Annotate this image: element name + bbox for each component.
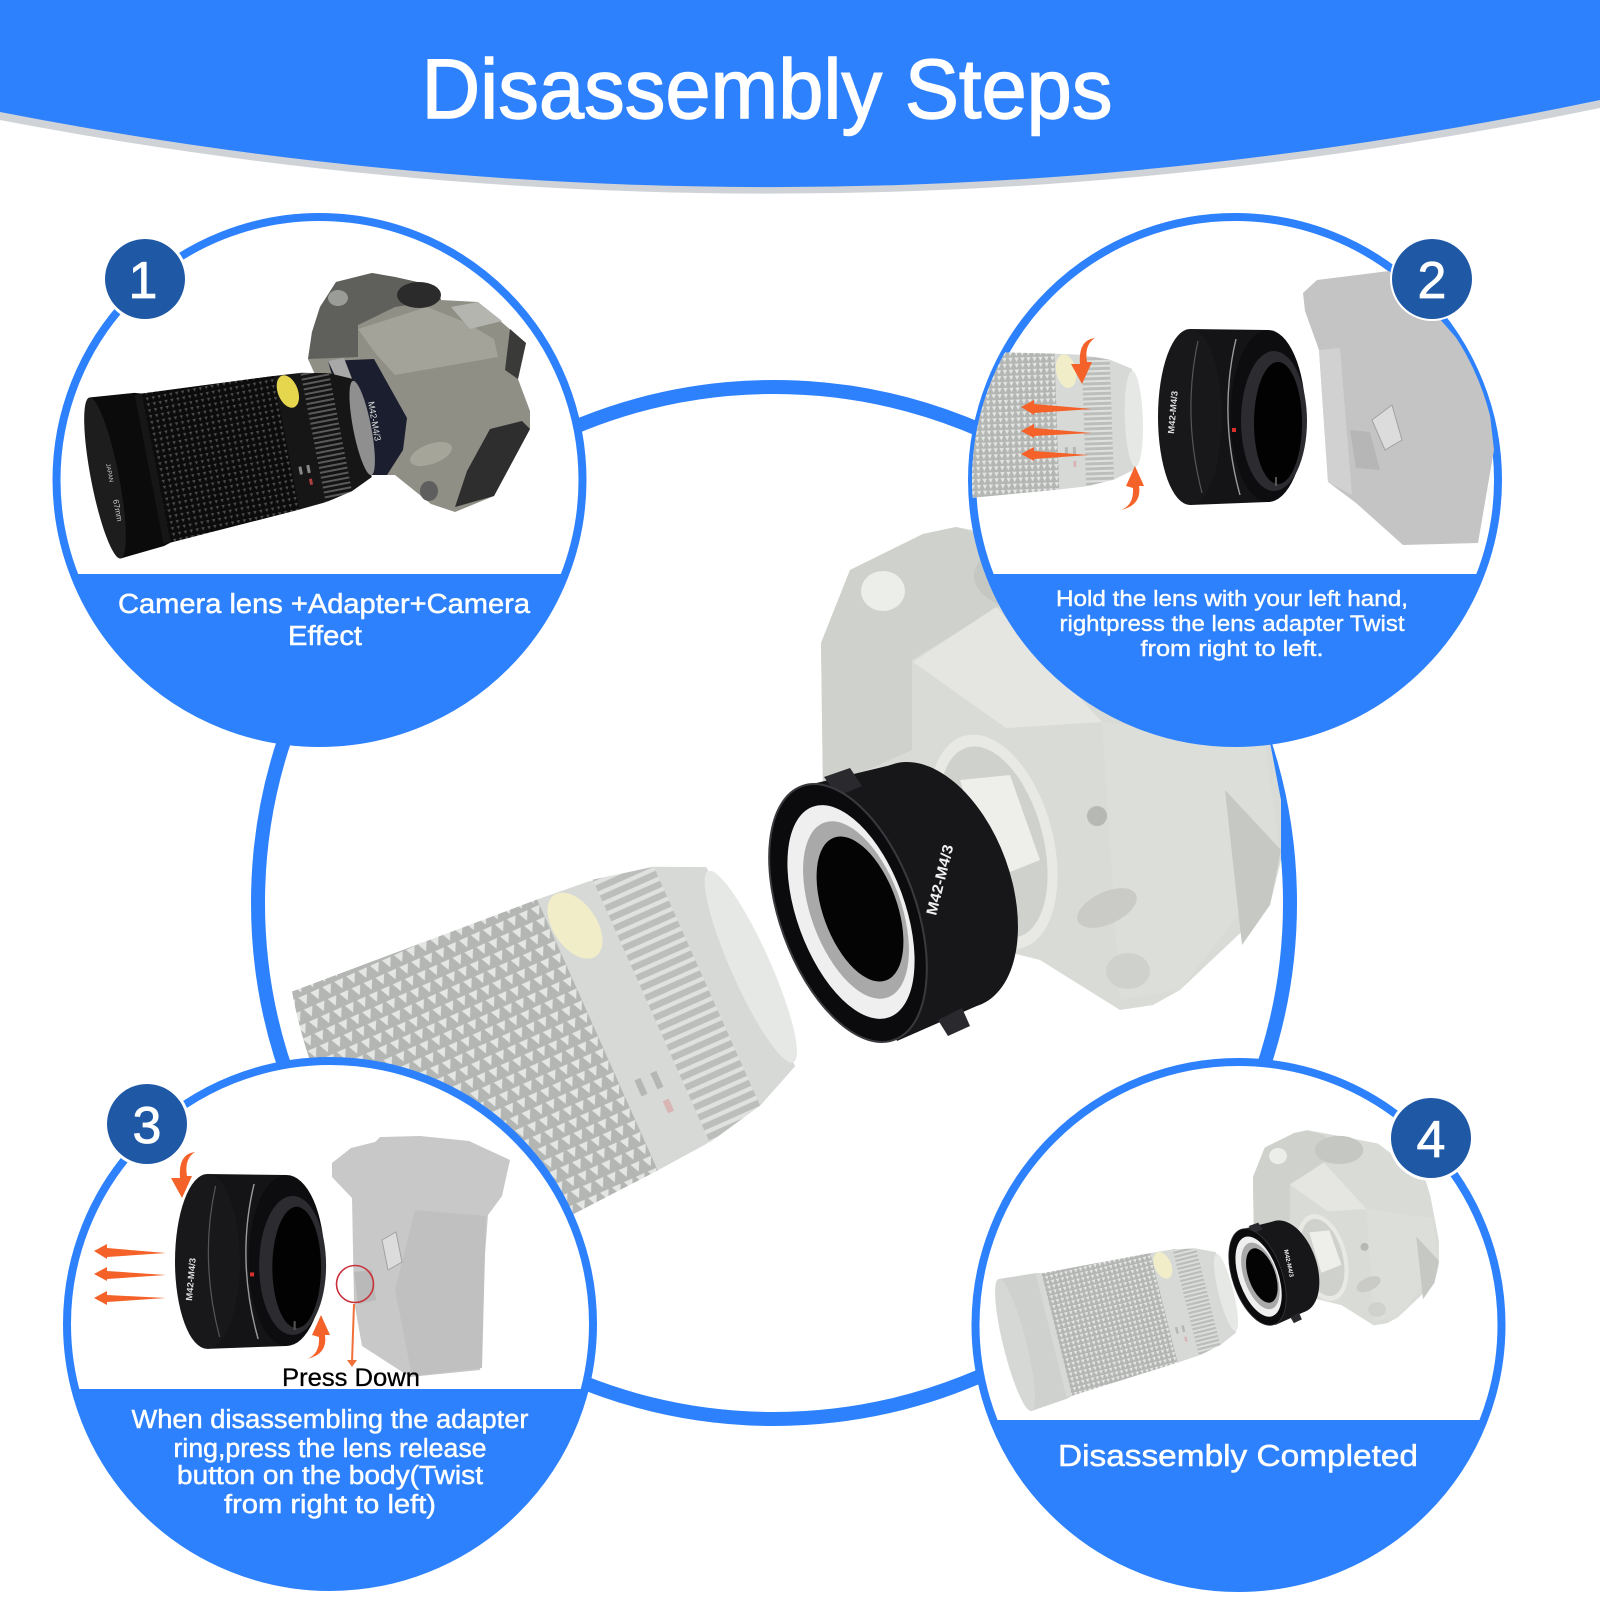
caption band [78,574,561,739]
orange arrows [1021,338,1144,510]
photo: lens, adapter and camera apart [855,271,1494,545]
badge 3 [104,1081,190,1167]
caption text: rightpress the lens adapter Twist [1060,611,1404,636]
badge 2 [1390,237,1474,321]
panel: step 3 [60,1061,600,1599]
photo: faded camera and lens with adapter: M42-M4/3 [1282,1249,1294,1278]
adapter rear view [175,1174,326,1349]
photo: lens, adapter and camera apart: M42-M4/3 [1166,390,1180,434]
badge 1 [102,236,188,322]
central image: faded lens [292,866,797,1214]
badge 3: 3 [133,1097,161,1155]
photo: lens adapter and camera assembled: 67mm [111,499,124,523]
caption text: Effect [288,620,362,651]
caption text: Camera lens +Adapter+Camera [118,588,530,619]
central ring [258,387,1290,1419]
central image: faded camera body [821,527,1281,1010]
caption band [79,1389,581,1583]
central image: adapter ring [738,739,1049,1063]
caption band [994,574,1476,739]
caption text [1056,586,1408,661]
caption text: Hold the lens with your left hand, [1056,586,1408,611]
badge 1: 1 [129,252,157,310]
badge 4 [1388,1095,1474,1181]
release button marker [336,1266,374,1367]
photo: lens adapter and camera assembled: JAPAN [104,463,114,483]
adapter rear view: M42-M4/3 [184,1257,198,1301]
panel: step 1 [40,217,600,774]
photo: faded camera and lens with adapter [987,1130,1439,1414]
photo: lens adapter and camera assembled: M42-M4/3 [366,401,383,442]
header banner [0,0,1600,194]
caption text: from right to left. [1140,636,1324,661]
caption text: ring,press the lens release [174,1435,486,1463]
photo: camera rear grey [332,1136,510,1377]
caption text: from right to left) [224,1491,436,1519]
caption band [998,1420,1480,1584]
badge 4: 4 [1417,1111,1445,1169]
caption text [132,1406,529,1519]
orange arrows [94,1152,330,1359]
panel: step 4 [960,1062,1520,1600]
caption text: button on the body(Twist [177,1462,483,1490]
panel: step 2 [968,213,1502,747]
title: Disassembly Steps [422,42,1112,136]
photo: lens adapter and camera assembled [76,273,530,561]
caption text [118,588,530,651]
central image: adapter ring: M42-M4/3 [923,843,957,917]
caption text: When disassembling the adapter [132,1406,529,1434]
caption text: Disassembly Completed [1058,1438,1418,1473]
badge 2: 2 [1418,252,1446,310]
press down label: Press Down [282,1364,420,1392]
